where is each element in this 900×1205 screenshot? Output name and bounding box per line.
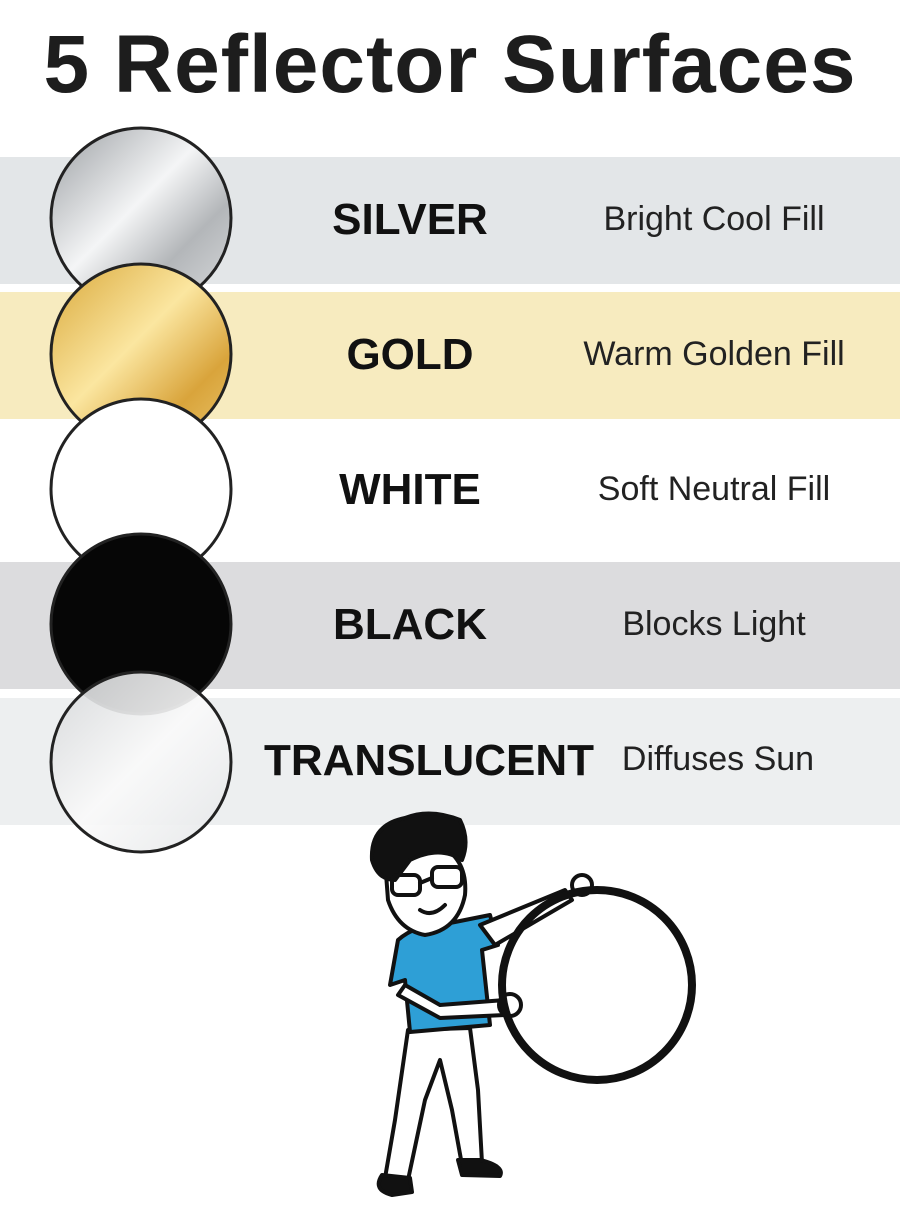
desc: gold: Warm Golden Fill (583, 335, 845, 373)
title: 5 Reflector Surfaces (43, 19, 856, 110)
label: silver: SILVER (332, 195, 488, 244)
hands (572, 875, 592, 895)
arms (480, 890, 572, 945)
disc: gold (51, 264, 231, 444)
disc: black (51, 534, 231, 714)
disc: translucent (51, 672, 231, 852)
hair (372, 813, 466, 880)
shoes (379, 1175, 412, 1195)
disc: white (51, 399, 231, 579)
shirt (390, 915, 498, 1032)
disc: silver (51, 128, 231, 308)
band: gold (0, 292, 900, 419)
desc: silver: Bright Cool Fill (603, 200, 825, 238)
label: gold: GOLD (346, 330, 474, 379)
band: translucent (0, 698, 900, 825)
desc: translucent: Diffuses Sun (622, 740, 814, 778)
glasses (392, 867, 462, 895)
desc: white: Soft Neutral Fill (598, 470, 830, 508)
label: black: BLACK (333, 600, 487, 649)
band: silver (0, 157, 900, 284)
smile (420, 905, 445, 913)
label: white: WHITE (339, 465, 481, 514)
reflector hoop (502, 890, 692, 1080)
desc: black: Blocks Light (622, 605, 806, 643)
legs (385, 1028, 482, 1180)
head (385, 844, 465, 935)
label: translucent: TRANSLUCENT (264, 736, 594, 785)
band: black (0, 562, 900, 689)
